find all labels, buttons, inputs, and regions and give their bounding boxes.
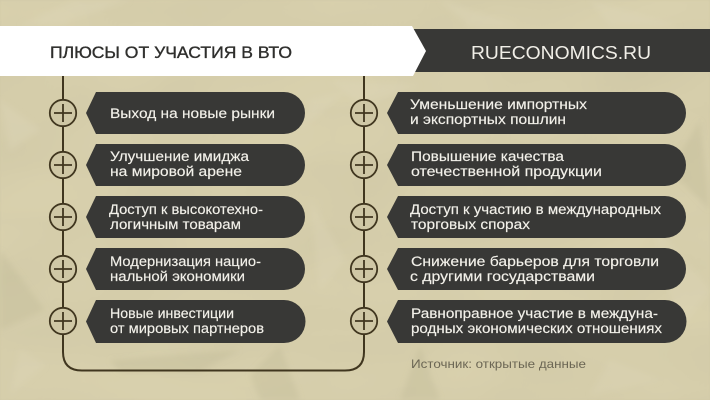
plus icon bbox=[351, 100, 377, 126]
item: tariffs bbox=[351, 92, 686, 134]
item: barriers bbox=[351, 248, 686, 290]
plus icon bbox=[50, 256, 76, 282]
title: ПЛЮСЫ ОТ УЧАСТИЯ В ВТО bbox=[50, 44, 292, 62]
item: barriers: с другими государствами bbox=[410, 269, 595, 284]
plus icon bbox=[351, 256, 377, 282]
plus icon bbox=[351, 204, 377, 230]
item: quality: Повышение качества bbox=[411, 149, 565, 164]
item: high tech: Доступ к высокотехно- bbox=[109, 202, 263, 217]
item: new markets bbox=[50, 92, 305, 134]
item: modernization: нальной экономики bbox=[110, 269, 245, 284]
site name: RUECONOMICS.RU bbox=[471, 42, 651, 63]
item: quality bbox=[351, 144, 686, 186]
item: image: на мировой арене bbox=[110, 164, 242, 179]
item: investment: от мировых партнеров bbox=[110, 321, 264, 336]
item: disputes bbox=[351, 196, 686, 238]
item: investment bbox=[50, 300, 305, 343]
item: equal participation: Равноправное участие в междуна- bbox=[411, 306, 658, 321]
plus icon bbox=[50, 204, 76, 230]
item: disputes: торговых спорах bbox=[411, 217, 530, 232]
plus icon bbox=[351, 152, 377, 178]
item: image: Улучшение имиджа bbox=[110, 149, 250, 164]
item: quality: отечественной продукции bbox=[411, 164, 602, 179]
item: investment: Новые инвестиции bbox=[110, 306, 234, 321]
item: tariffs: и экспортных пошлин bbox=[410, 112, 566, 127]
item: modernization: Модернизация нацио- bbox=[110, 254, 261, 269]
plus icon bbox=[351, 308, 377, 334]
item: barriers: Снижение барьеров для торговли bbox=[411, 254, 659, 269]
item: equal participation: родных экономических отношениях bbox=[411, 321, 662, 336]
item: high tech: логичным товарам bbox=[110, 217, 241, 232]
right column bbox=[351, 92, 686, 343]
item: high tech bbox=[50, 196, 305, 238]
item: image bbox=[50, 144, 305, 186]
source note: Источник: открытые данные bbox=[411, 357, 586, 371]
connector line bbox=[63, 76, 364, 370]
item: tariffs: Уменьшение импортных bbox=[410, 97, 587, 112]
plus icon bbox=[50, 308, 76, 334]
item: equal participation bbox=[351, 300, 686, 343]
header: dark site band bbox=[405, 29, 710, 72]
plus icon bbox=[50, 152, 76, 178]
item: modernization bbox=[50, 248, 305, 290]
item: new markets: Выход на новые рынки bbox=[110, 106, 275, 121]
header: white title band bbox=[0, 26, 426, 76]
plus icon bbox=[50, 100, 76, 126]
item: disputes: Доступ к участию в международных bbox=[410, 202, 661, 217]
left column bbox=[50, 92, 305, 343]
